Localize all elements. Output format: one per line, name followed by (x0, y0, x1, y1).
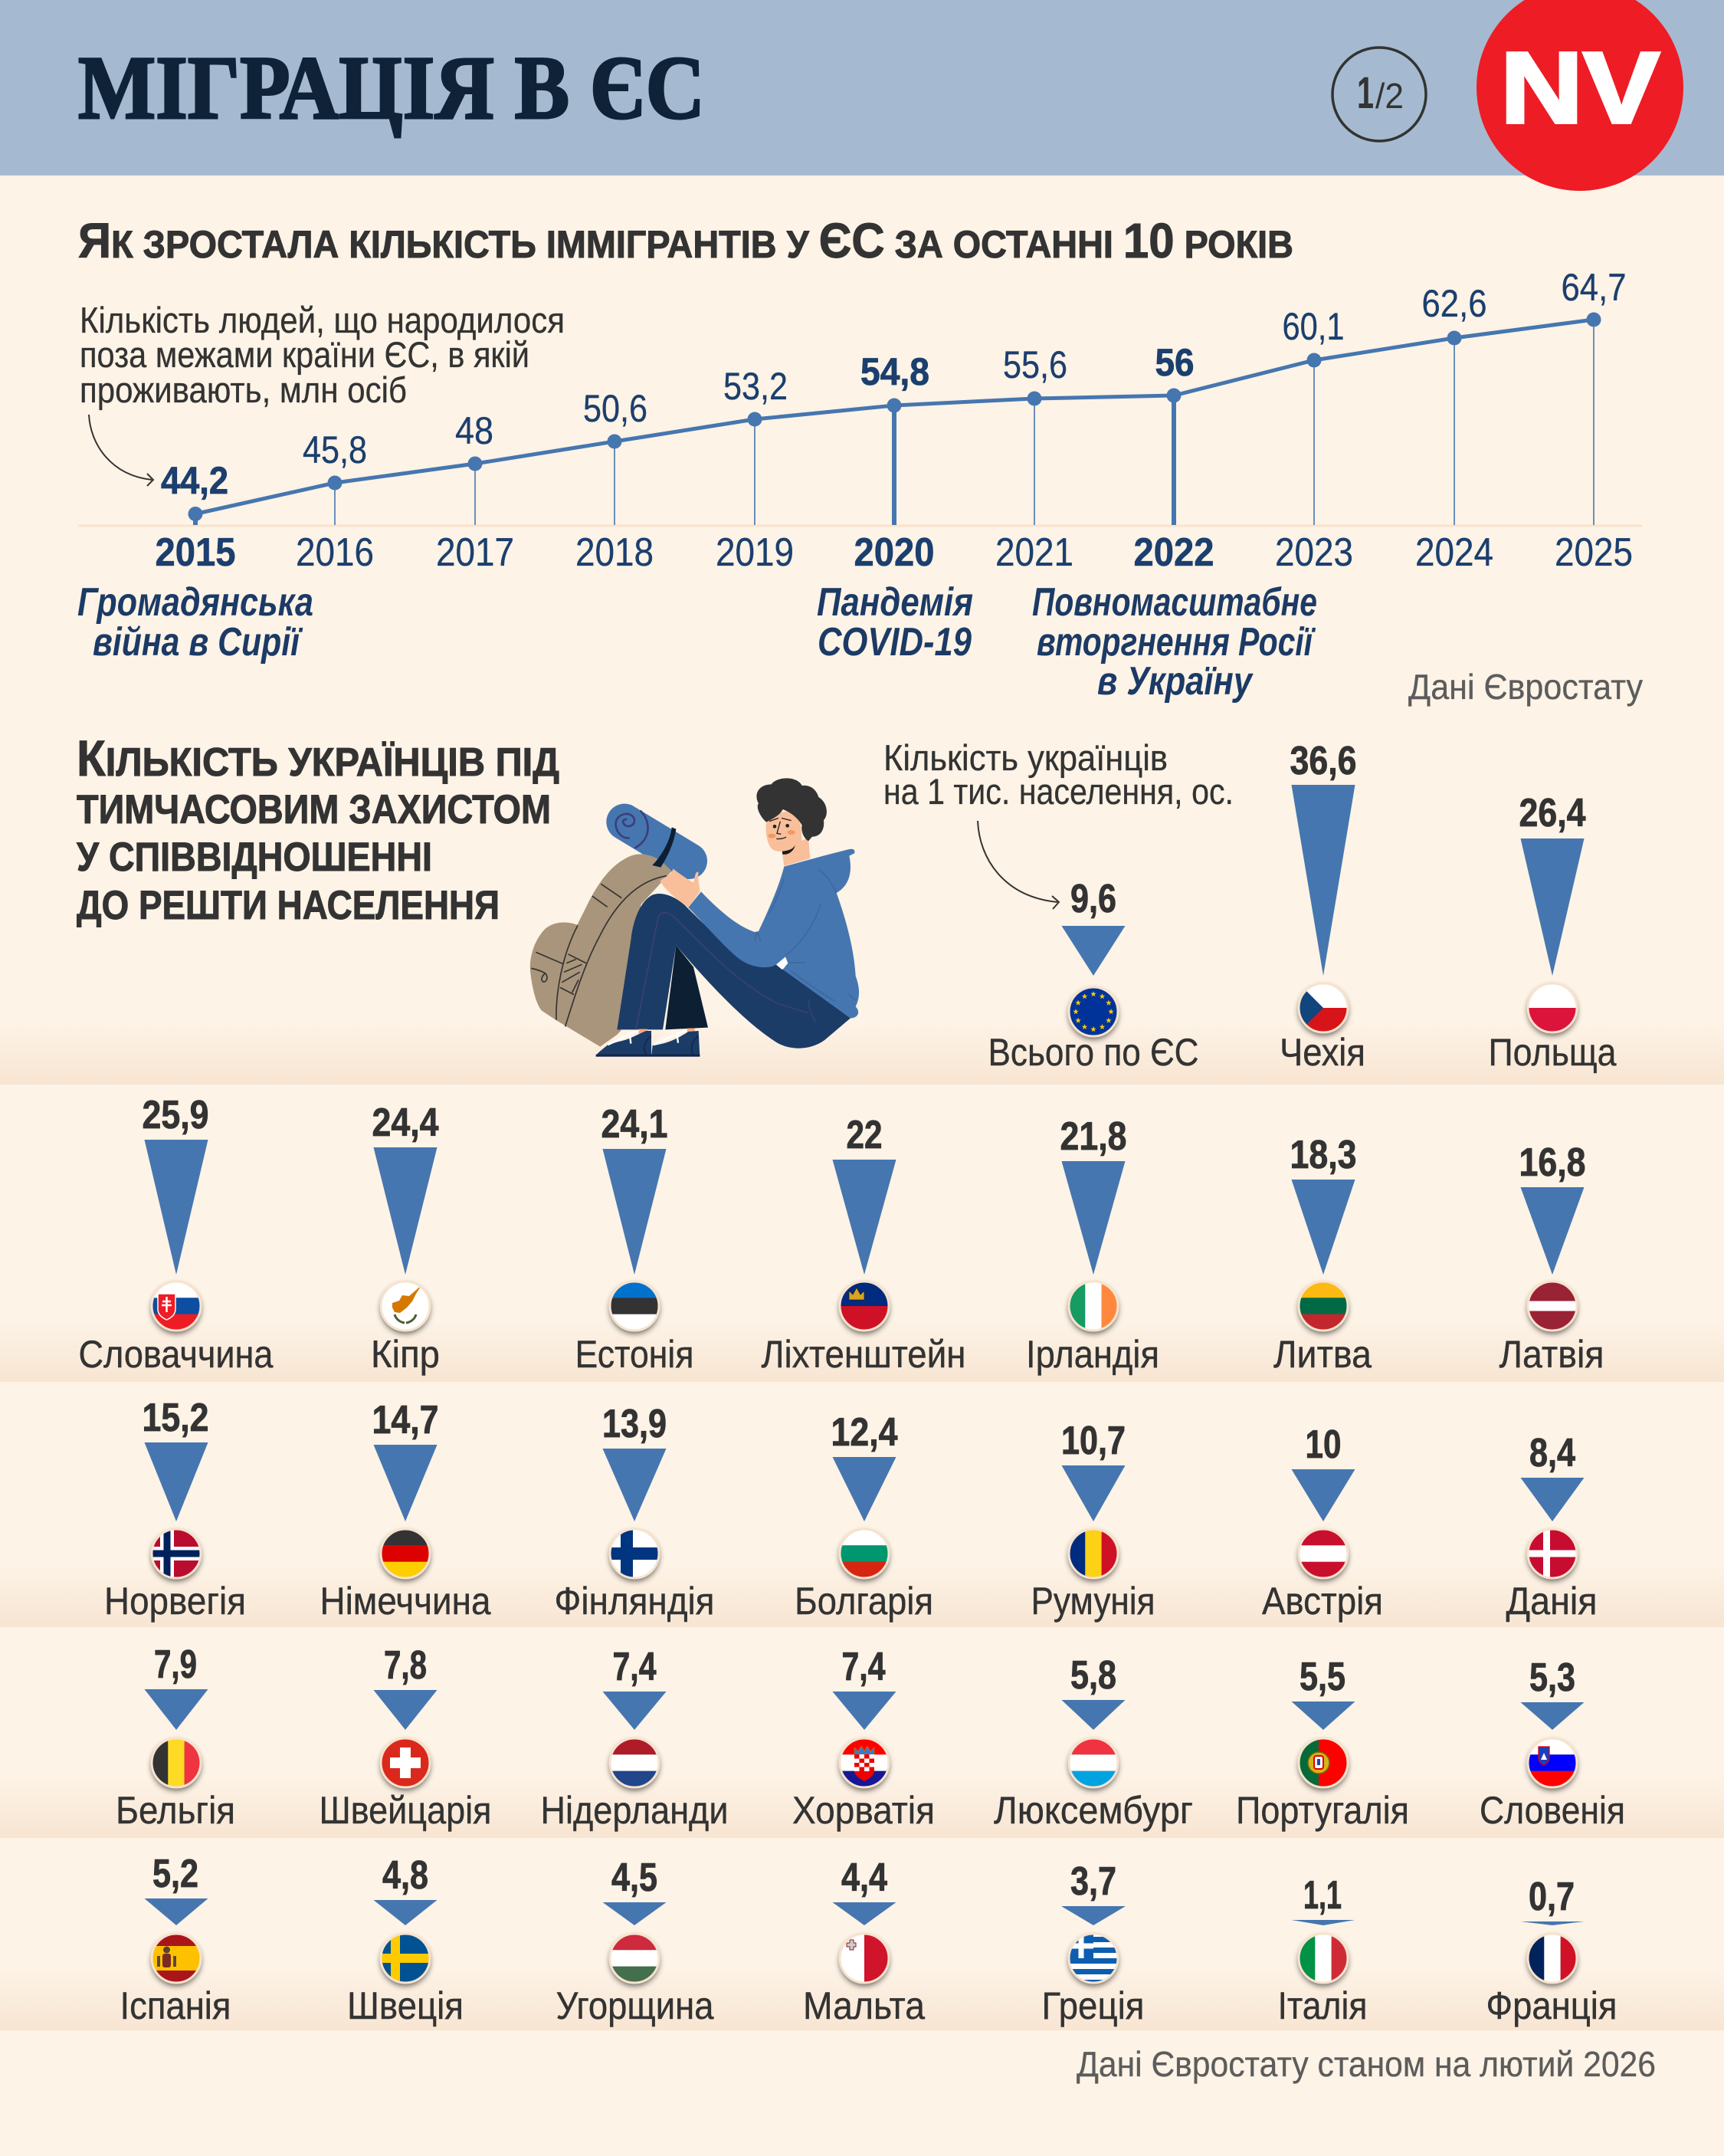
name: Угорщина (556, 1984, 714, 2027)
triangle bar (1520, 1187, 1585, 1275)
name: Фінляндія (555, 1580, 714, 1623)
name: Італія (1278, 1984, 1367, 2027)
country: Belgium (116, 1642, 235, 1832)
icon: Romanian flag (1069, 1529, 1118, 1581)
chart year axis: 2025 (1555, 530, 1633, 575)
country: Portugal (1236, 1655, 1409, 1832)
name: Бельгія (116, 1789, 235, 1832)
value: 5,8 (1070, 1653, 1116, 1698)
triangle bar (1292, 1180, 1355, 1275)
value: 36,6 (1290, 739, 1356, 783)
triangle bar (374, 1690, 437, 1730)
source 1: Дані Євростату (1408, 667, 1643, 707)
chart values: 60,1 (1283, 305, 1344, 348)
country: Germany (320, 1398, 491, 1623)
name: Австрія (1262, 1580, 1383, 1623)
country: France (1486, 1875, 1617, 2027)
triangle bar (1292, 1702, 1355, 1730)
icon: Finnish flag (610, 1529, 659, 1581)
value: 14,7 (372, 1398, 438, 1442)
trousers (617, 894, 851, 1048)
name: Мальта (803, 1984, 925, 2027)
value: 13,9 (602, 1402, 667, 1446)
event: COVID: Пандемія (817, 580, 973, 625)
value: 25,9 (143, 1093, 208, 1137)
value: 21,8 (1060, 1114, 1126, 1159)
chart annotation (80, 300, 565, 410)
icon: Belgian flag (152, 1738, 201, 1790)
title: МІГРАЦІЯ В ЄС (78, 38, 705, 138)
name: Словаччина (78, 1333, 274, 1376)
value: 3,7 (1070, 1859, 1116, 1904)
country: Switzerland (319, 1643, 492, 1832)
triangle bar (1062, 1161, 1125, 1275)
name: Словенія (1480, 1789, 1625, 1832)
icon: Swiss flag (381, 1738, 430, 1790)
value: 7,8 (384, 1643, 427, 1688)
value: 9,6 (1070, 877, 1116, 921)
chart values: 48 (455, 409, 493, 452)
name: Хорватія (792, 1789, 935, 1832)
value: 12,4 (831, 1410, 898, 1455)
name: Швейцарія (319, 1789, 492, 1832)
heading: immigrants growth: ЯК ЗРОСТАЛА КІЛЬКІСТЬ ІММІГРАНТІВ У ЄС ЗА ОСТАННІ 10 РОКІВ (78, 213, 1293, 268)
country: Slovenia (1480, 1656, 1625, 1832)
icon: Norwegian flag (152, 1529, 201, 1581)
country: Poland (1488, 791, 1617, 1074)
heading: Ukrainians under protection: КІЛЬКІСТЬ УКРАЇНЦІВ ПІД (77, 730, 559, 786)
chart values (161, 266, 1626, 502)
country: Latvia (1499, 1140, 1604, 1376)
country: Sweden (347, 1853, 464, 2027)
heading: Ukrainians under protection: ДО РЕШТИ НАСЕЛЕННЯ (77, 883, 500, 928)
value: 1,1 (1303, 1873, 1342, 1918)
chart values: 55,6 (1003, 343, 1067, 386)
triangle bar (602, 1449, 667, 1521)
country: Italy (1278, 1873, 1367, 2027)
arrow to first value (89, 415, 153, 486)
icon: Portuguese flag (1299, 1738, 1348, 1790)
triangle bar (832, 1160, 896, 1275)
country: Netherlands (541, 1645, 728, 1832)
name: Ліхтенштейн (762, 1333, 965, 1376)
triangle bar (1292, 1469, 1355, 1521)
head (756, 778, 827, 866)
chart year axis: 2019 (716, 530, 794, 575)
triangle bar (374, 1900, 437, 1925)
header band (0, 0, 1724, 176)
icon: Greek flag (1069, 1934, 1118, 1986)
shoes (596, 1029, 700, 1057)
chart year axis: 2022 (1134, 530, 1214, 575)
value: 10,7 (1061, 1419, 1126, 1463)
triangle bar (1520, 1921, 1585, 1925)
value: 24,4 (372, 1101, 439, 1145)
heading: Ukrainians under protection: У СПІВВІДНОШЕННІ (77, 835, 432, 880)
country: Hungary (556, 1856, 714, 2027)
legend note (883, 737, 1234, 812)
icon: Slovak flag (152, 1281, 201, 1334)
country: Norway (104, 1396, 246, 1623)
icon: Estonian flag (610, 1281, 659, 1334)
value: 0,7 (1529, 1875, 1575, 1919)
name: Кіпр (371, 1333, 440, 1376)
name: Естонія (575, 1333, 694, 1376)
chart year axis: 2024 (1415, 530, 1493, 575)
legend note: Кількість українців (883, 737, 1168, 778)
country: Croatia (792, 1645, 935, 1832)
chart year axis: 2021 (995, 530, 1073, 575)
event: invasion: в Україну (1097, 659, 1254, 704)
country: Greece (1042, 1859, 1145, 2027)
name: Німеччина (320, 1580, 491, 1623)
icon: Swedish flag (381, 1934, 430, 1986)
arrow to EU value (978, 821, 1059, 909)
name: Чехія (1280, 1031, 1365, 1074)
value: 16,8 (1519, 1140, 1586, 1185)
event: invasion (1032, 580, 1317, 704)
triangle bar (374, 1445, 437, 1521)
illustration: person with backpack (530, 778, 859, 1057)
chart values: 45,8 (303, 428, 367, 471)
country: Lithuania (1273, 1133, 1372, 1376)
value: 24,1 (601, 1102, 668, 1147)
country: Romania (1031, 1419, 1155, 1623)
value: 5,3 (1529, 1656, 1575, 1700)
name: Литва (1273, 1333, 1372, 1376)
hand (660, 868, 700, 907)
chart values: 62,6 (1422, 282, 1486, 325)
icon: Lithuanian flag (1299, 1281, 1348, 1334)
triangle bar (602, 1149, 667, 1275)
event: Syria (77, 580, 313, 665)
chart values: 64,7 (1562, 266, 1626, 309)
name: Польща (1488, 1031, 1617, 1074)
country: Malta (803, 1856, 925, 2027)
country: Bulgaria (795, 1410, 933, 1623)
name: Болгарія (795, 1580, 933, 1623)
country: Spain (120, 1852, 231, 2027)
triangle bar (144, 1442, 208, 1521)
triangle bar (1520, 1478, 1585, 1521)
value: 22 (846, 1113, 883, 1157)
value: 8,4 (1529, 1431, 1575, 1475)
triangle bar (1062, 926, 1125, 976)
chart values: 50,6 (583, 387, 647, 430)
icon: Maltese flag (840, 1934, 889, 1986)
triangle bar (144, 1689, 208, 1730)
triangle bar (832, 1692, 896, 1730)
value: 7,4 (613, 1645, 657, 1689)
country: Slovakia (78, 1093, 274, 1376)
source 2: Дані Євростату станом на лютий 2026 (1077, 2044, 1656, 2084)
country: Finland (555, 1402, 714, 1623)
icon: French flag (1528, 1934, 1577, 1986)
value: 10 (1306, 1423, 1341, 1467)
chart annotation: Кількість людей, що народилося (80, 300, 565, 340)
icon: German flag (381, 1529, 430, 1581)
chart values: 53,2 (723, 365, 788, 408)
triangle bar (144, 1898, 208, 1925)
name: Іспанія (120, 1984, 231, 2027)
event: Syria: війна в Сирії (93, 620, 303, 665)
icon: Polish flag (1528, 983, 1577, 1035)
value: 18,3 (1290, 1133, 1356, 1177)
value: 7,4 (841, 1645, 886, 1689)
country: Liechtenstein (762, 1113, 965, 1376)
name: Латвія (1499, 1333, 1604, 1376)
chart values: 56 (1155, 341, 1194, 384)
triangle bar (832, 1902, 896, 1925)
value: 7,9 (154, 1642, 197, 1687)
icon: Austrian flag (1299, 1529, 1348, 1581)
chart year axis: 2016 (296, 530, 374, 575)
page marker 1/2: /2 (1375, 76, 1404, 116)
icon: Latvian flag (1528, 1281, 1577, 1334)
triangle bar (1520, 1702, 1585, 1730)
icon: Slovenian flag (1528, 1738, 1577, 1790)
icon: Luxembourg flag (1069, 1738, 1118, 1790)
icon: Bulgarian flag (840, 1529, 889, 1581)
event: Syria: Громадянська (77, 580, 313, 625)
icon: Czech flag (1299, 983, 1348, 1035)
chart year axis: 2020 (854, 530, 935, 575)
name: Франція (1486, 1984, 1617, 2027)
icon: Danish flag (1528, 1529, 1577, 1581)
name: Ірландія (1026, 1333, 1159, 1376)
heading: Ukrainians under protection (77, 730, 559, 928)
icon: Spanish flag (152, 1934, 201, 1986)
value: 26,4 (1519, 791, 1586, 835)
name: Всього по ЄС (988, 1031, 1198, 1074)
event: invasion: вторгнення Росії (1037, 620, 1316, 665)
icon: Cypriot flag (381, 1281, 430, 1334)
chart annotation: проживають, млн осіб (80, 369, 407, 410)
chart values: 44,2 (161, 459, 228, 502)
icon: Croatian flag (840, 1738, 889, 1790)
name: Румунія (1031, 1580, 1155, 1623)
logo NV (1477, 0, 1683, 191)
country: EU (988, 877, 1198, 1074)
triangle bar (144, 1140, 208, 1275)
chart year axis: 2023 (1275, 530, 1353, 575)
triangle bar (1292, 1920, 1355, 1925)
page marker 1/2: 1 (1357, 68, 1374, 118)
triangle bar (1061, 1906, 1126, 1925)
triangle bar (374, 1147, 437, 1275)
name: Португалія (1236, 1789, 1409, 1832)
value: 5,5 (1300, 1655, 1345, 1699)
heading: Ukrainians under protection: ТИМЧАСОВИМ ЗАХИСТОМ (77, 787, 551, 832)
chart values: 54,8 (860, 350, 929, 393)
icon: Hungarian flag (610, 1934, 659, 1986)
name: Нідерланди (541, 1789, 728, 1832)
value: 4,8 (382, 1853, 428, 1898)
country: Cyprus (371, 1101, 440, 1376)
event: COVID: COVID-19 (818, 620, 972, 665)
value: 5,2 (152, 1852, 198, 1896)
name: Норвегія (104, 1580, 246, 1623)
name: Люксембург (994, 1789, 1193, 1832)
country: Denmark (1506, 1431, 1597, 1623)
country: Luxembourg (994, 1653, 1193, 1832)
event: COVID (817, 580, 973, 665)
hoodie (688, 849, 859, 1018)
country: Czechia (1280, 739, 1365, 1074)
chart year axis (155, 530, 1633, 575)
logo NV: NV (1500, 31, 1660, 144)
event: invasion: Повномасштабне (1032, 580, 1317, 625)
chart annotation: поза межами країни ЄС, в якій (80, 334, 529, 375)
name: Греція (1042, 1984, 1145, 2027)
backpack (530, 827, 676, 1047)
triangle bar (1520, 838, 1585, 976)
triangle bar (832, 1457, 896, 1521)
name: Швеція (347, 1984, 464, 2027)
icon: EU flag (1069, 987, 1118, 1039)
legend note: на 1 тис. населення, ос. (883, 771, 1234, 812)
country: Estonia (575, 1102, 694, 1376)
icon: Dutch flag (610, 1738, 659, 1790)
chart year axis: 2018 (575, 530, 654, 575)
name: Данія (1506, 1580, 1597, 1623)
country: Ireland (1026, 1114, 1159, 1376)
chart year axis: 2017 (436, 530, 514, 575)
icon: Irish flag (1069, 1281, 1118, 1334)
icon: Italian flag (1299, 1934, 1348, 1986)
value: 15,2 (143, 1396, 208, 1440)
triangle bar (602, 1902, 667, 1925)
triangle bar (1292, 785, 1355, 976)
country: Austria (1262, 1423, 1383, 1623)
triangle bar (602, 1692, 667, 1730)
icon: Liechtenstein flag (840, 1281, 889, 1334)
chart year axis: 2015 (155, 530, 236, 575)
line chart: immigrants 2015-2025 (78, 266, 1642, 575)
value: 4,5 (611, 1856, 657, 1900)
page marker 1/2 (1332, 48, 1426, 141)
triangle bar (1062, 1465, 1125, 1521)
sleeping mat (616, 811, 689, 861)
value: 4,4 (841, 1856, 887, 1900)
triangle bar (1062, 1700, 1125, 1730)
